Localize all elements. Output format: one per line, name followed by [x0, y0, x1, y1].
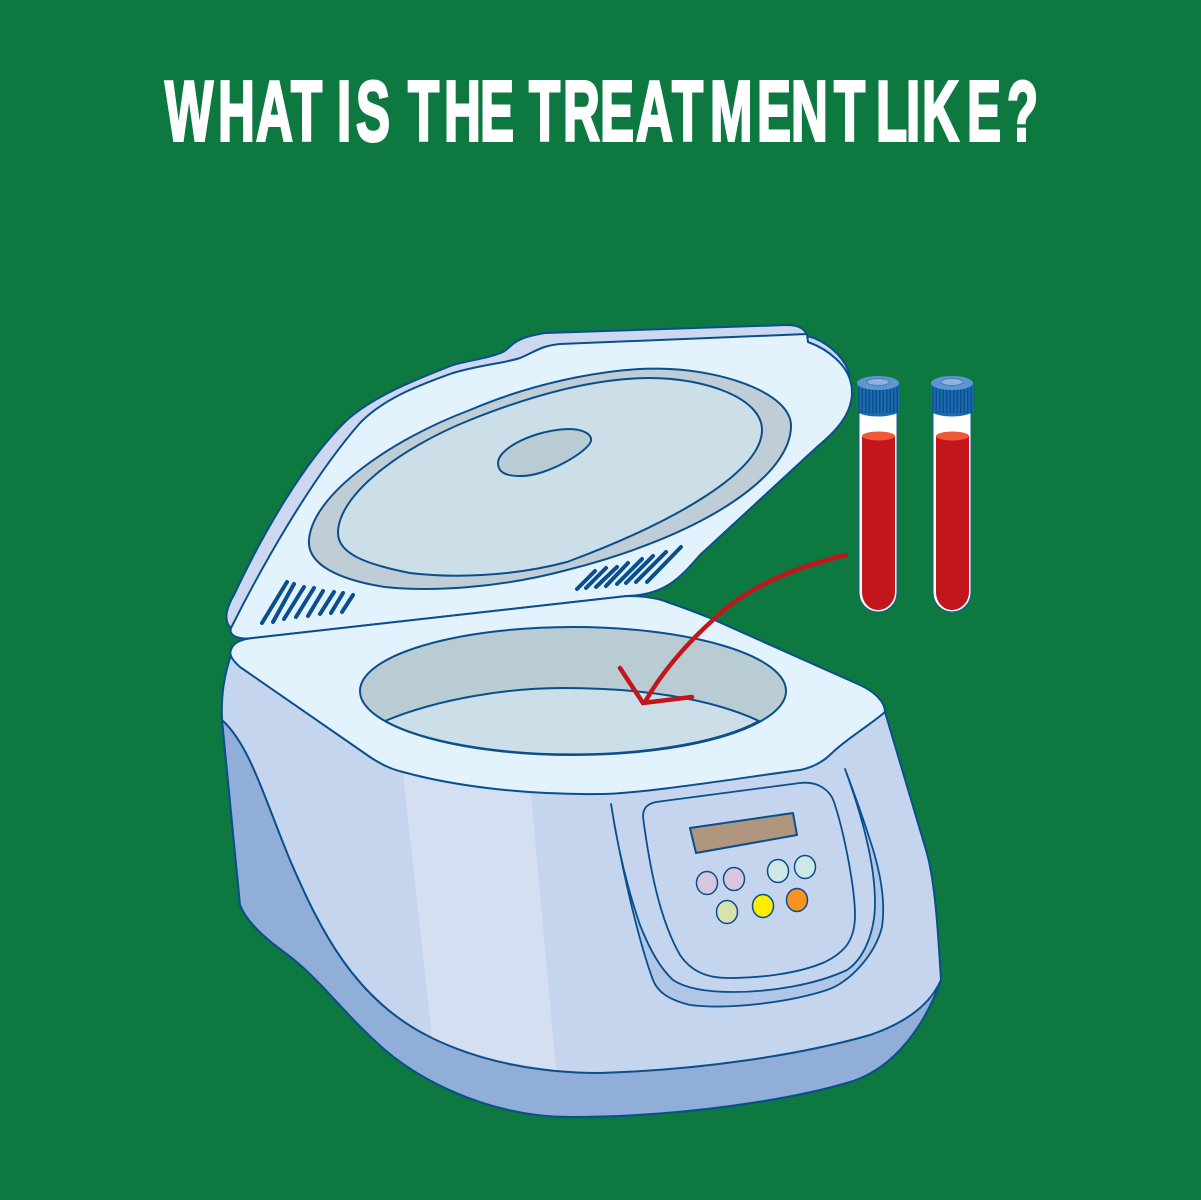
body shadow	[222, 720, 941, 1117]
lid face	[231, 334, 852, 639]
chamber floor	[385, 688, 759, 754]
lid knob	[498, 429, 591, 476]
red arrow	[620, 555, 846, 703]
right vents	[577, 547, 681, 589]
centrifuge machine	[222, 325, 941, 1117]
control panel	[643, 783, 855, 978]
lid ring	[309, 369, 791, 589]
blood tube 1	[857, 376, 899, 612]
control panel swoosh	[611, 769, 883, 1007]
buttons	[696, 856, 816, 924]
base top deck	[230, 596, 885, 794]
centrifuge chamber	[360, 627, 786, 755]
left vents	[262, 582, 353, 623]
lid window	[338, 378, 762, 576]
title: WHAT IS THE TREATMENT LIKE?	[165, 64, 1038, 159]
blood tube 2	[931, 376, 973, 612]
centrifuge body	[222, 652, 941, 1117]
lid back edge	[226, 325, 852, 637]
body highlight strip	[403, 772, 556, 1070]
display screen	[690, 813, 797, 853]
